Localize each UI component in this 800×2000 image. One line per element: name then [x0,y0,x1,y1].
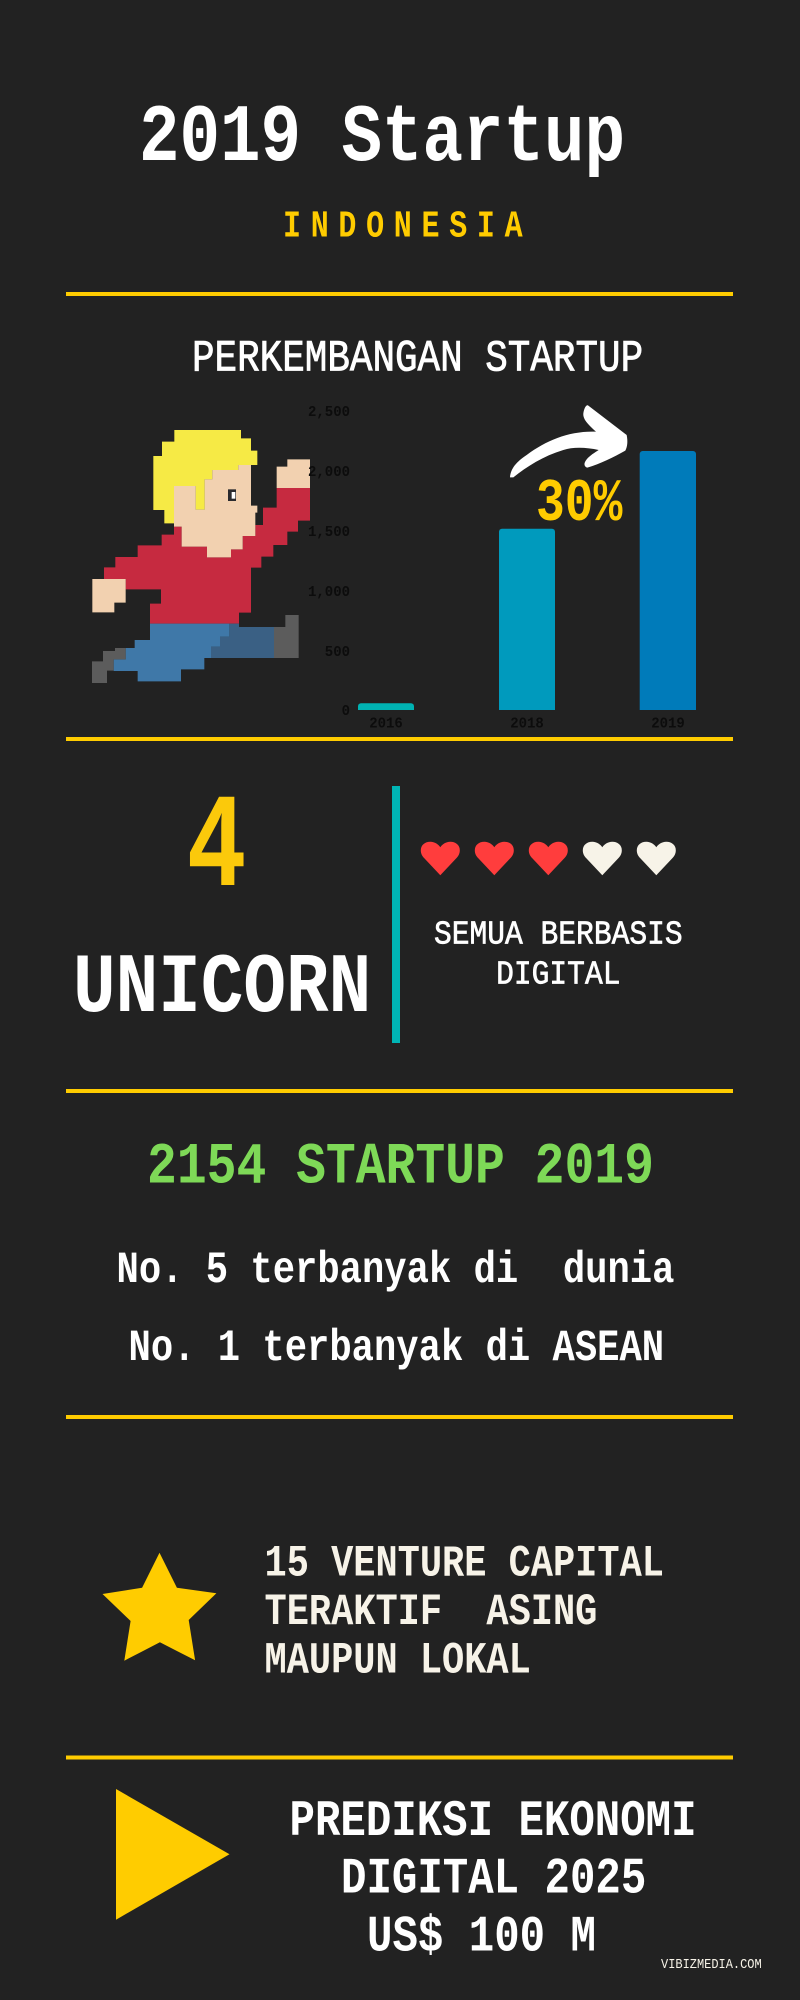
y axis labels: 2,000 [308,465,350,481]
y axis labels: 0 [342,704,350,720]
bar 2016 [358,703,414,710]
icon: pixel running man [92,430,310,683]
y axis labels: 1,500 [308,525,350,541]
heading: perkembangan startup: PERKEMBANGAN STARTUP [192,335,643,385]
x axis labels: 2019 [651,716,685,733]
y axis labels: 500 [325,645,350,661]
text: prediksi ekonomi digital [290,1794,697,1967]
text: rankings: No. 1 terbanyak di ASEAN [128,1324,664,1374]
y axis labels: 2,500 [308,405,350,421]
x axis labels: 2018 [510,716,544,733]
text: semua berbasis digital: SEMUA BERBASIS [434,917,683,954]
text: venture capital: TERAKTIF ASING [264,1588,597,1638]
text: prediksi ekonomi digital: US$ 100 M [367,1909,596,1967]
y axis labels: 1,000 [308,585,350,601]
text: prediksi ekonomi digital: PREDIKSI EKONOMI [290,1794,697,1851]
callout: 30%: 30% [536,471,623,539]
number 4: 4 [186,774,247,926]
y axis labels [308,405,350,720]
text: rankings: No. 5 terbanyak di dunia [116,1246,674,1296]
text: rankings [116,1246,674,1374]
icon: star [102,1553,216,1661]
text: venture capital: 15 VENTURE CAPITAL [264,1540,664,1590]
stat: 4 unicorn [73,774,371,1037]
text: venture capital [264,1540,664,1687]
text: semua berbasis digital: DIGITAL [496,957,620,994]
x axis labels [369,716,685,733]
title: 2019 Startup [139,94,625,185]
x axis labels: 2016 [369,716,403,733]
teal divider [392,786,400,1043]
bar 2019 [640,451,696,710]
text: prediksi ekonomi digital: DIGITAL 2025 [341,1851,646,1909]
text: venture capital: MAUPUN LOKAL [264,1637,531,1687]
bar chart: startup growth [308,405,696,733]
bar 2018 [499,529,555,710]
label unicorn: UNICORN [73,942,371,1037]
icon row: hearts [421,842,676,875]
icon: play triangle [116,1789,230,1920]
text: semua berbasis digital [434,917,683,994]
credit: vibizmedia: VIBIZMEDIA.COM [661,1956,762,1972]
arrow: growth [510,405,627,477]
heading: 2154 startup 2019: 2154 STARTUP 2019 [147,1135,654,1201]
subtitle: Indonesia: INDONESIA [283,206,532,249]
